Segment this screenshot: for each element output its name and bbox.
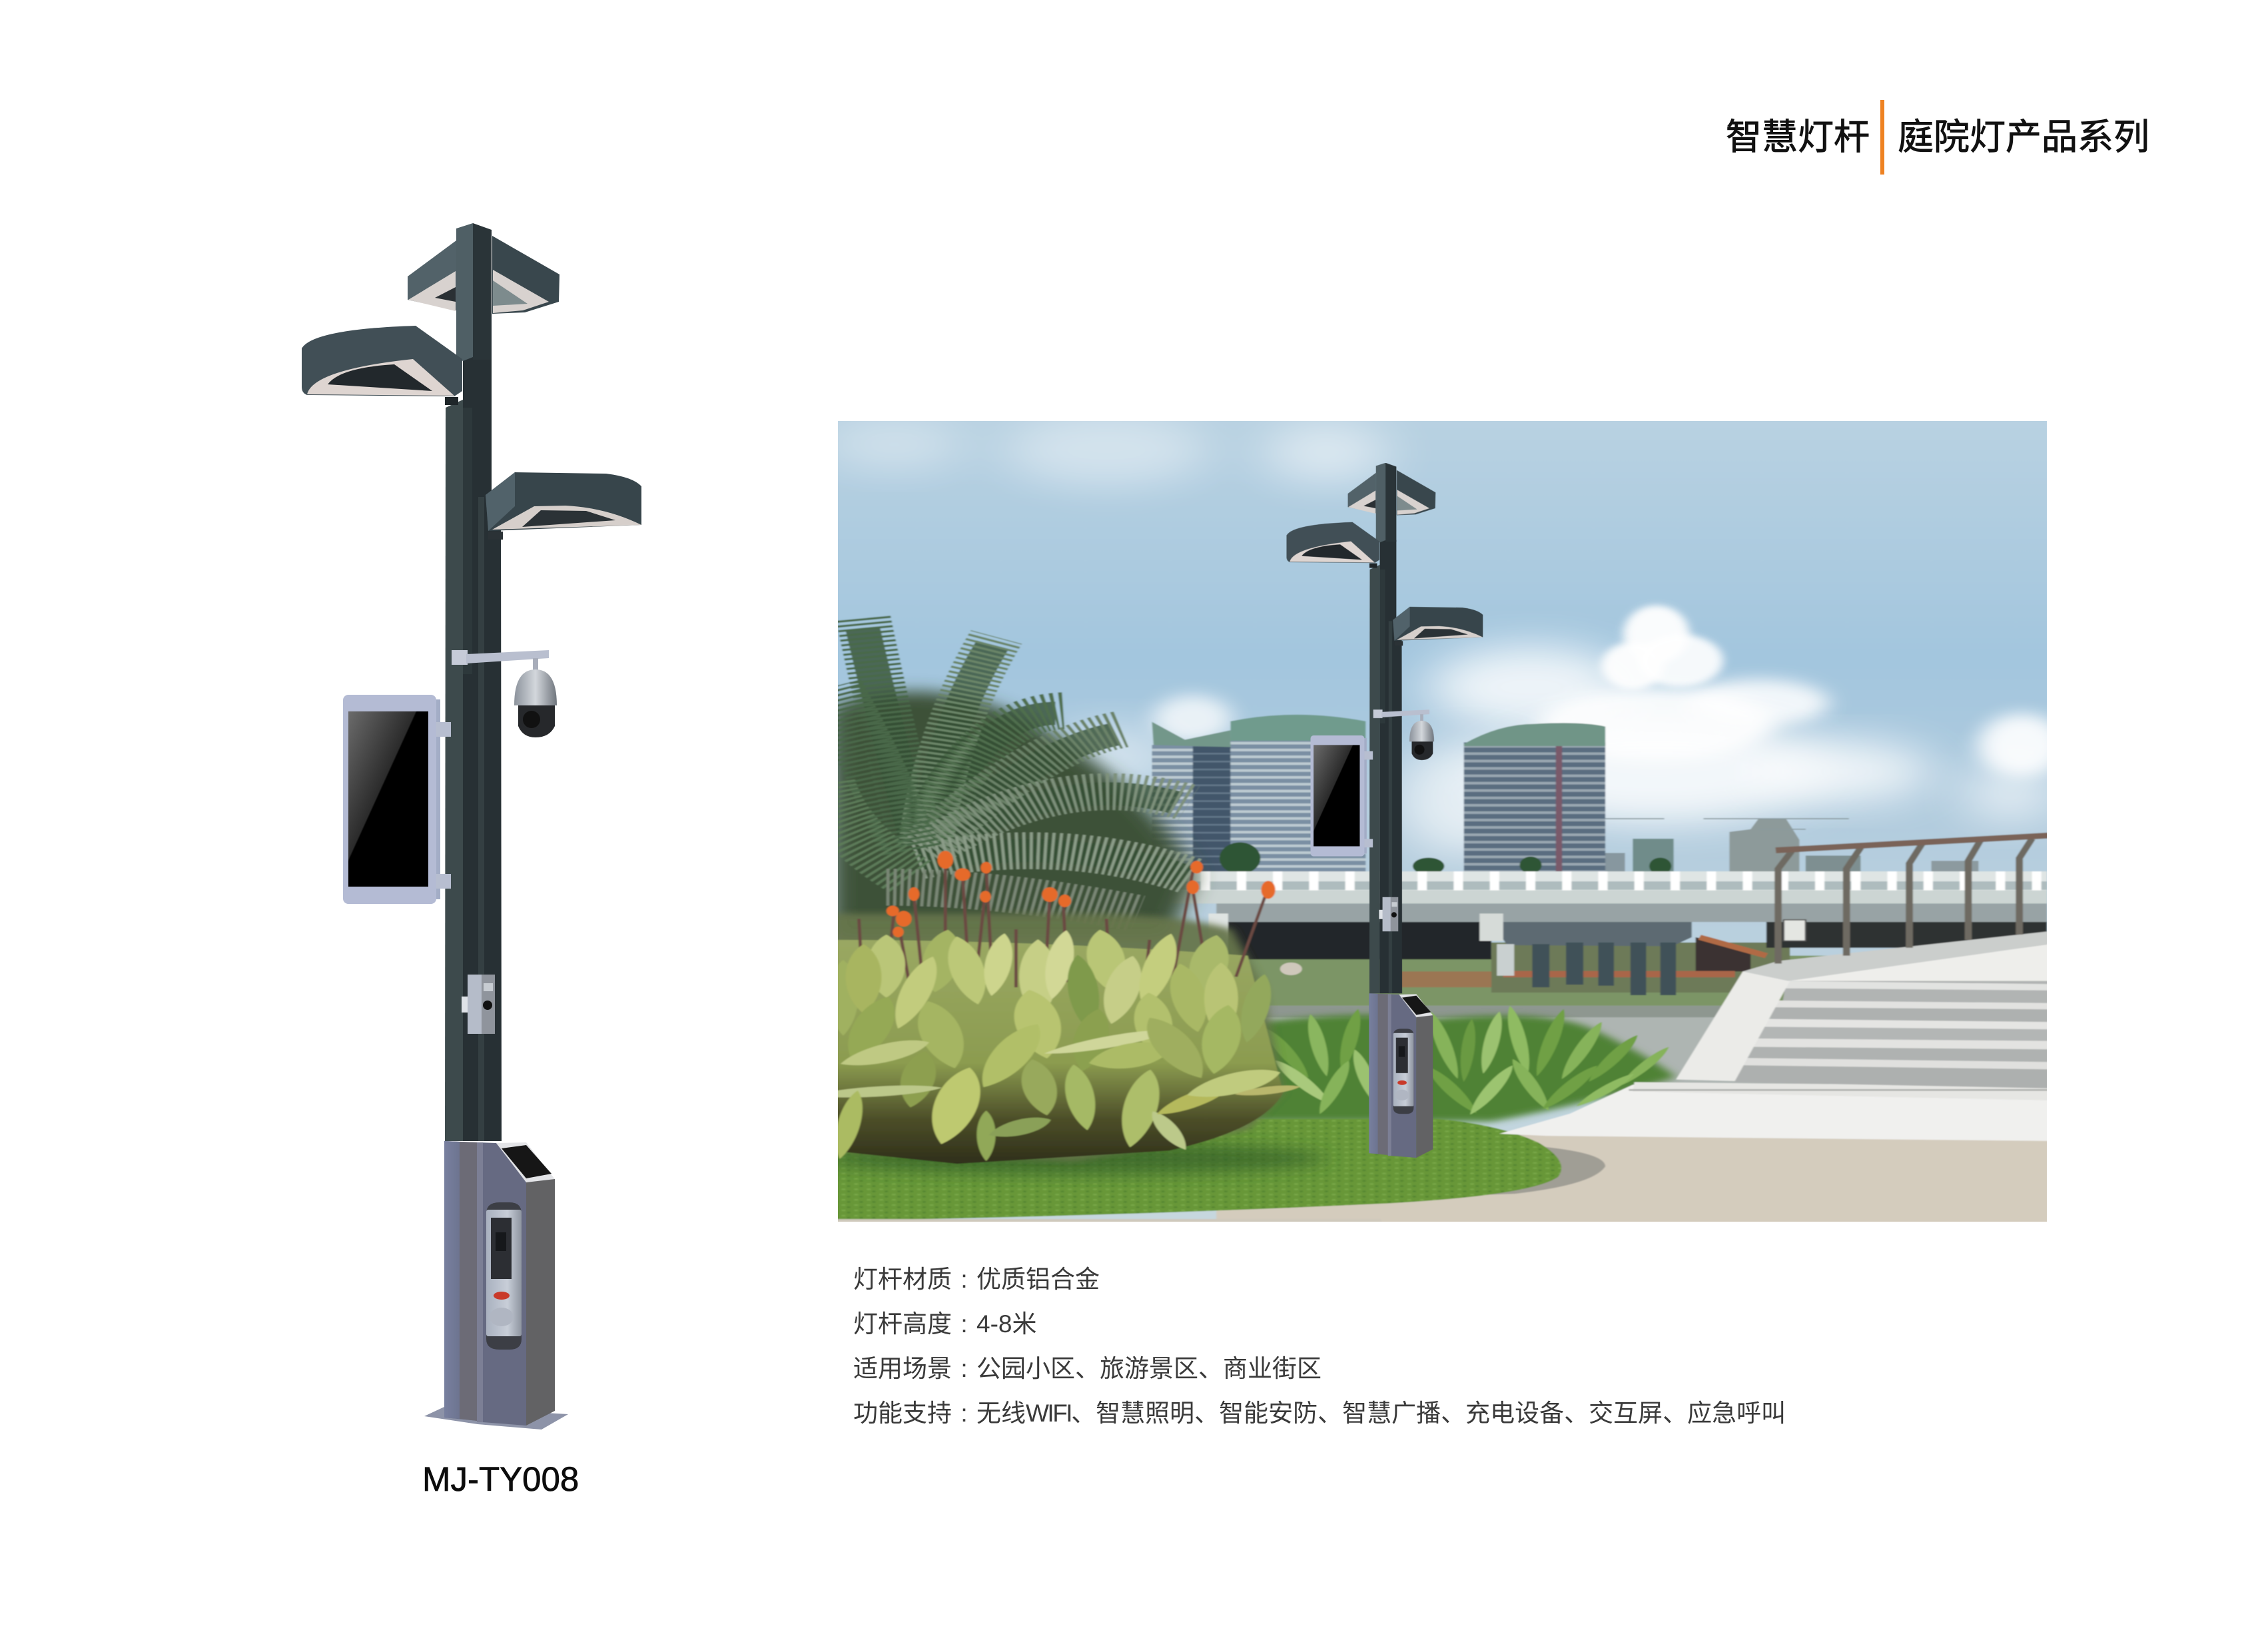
spec: applicable scenes: : xyxy=(960,1355,968,1382)
base plate xyxy=(424,1407,568,1430)
spec: functions: 功能支持 无线WIFI、智慧照明、智能安防、智慧广播、充电设备、交互屏、应急呼叫 xyxy=(853,1400,1786,1427)
canna flowers xyxy=(887,851,1276,937)
sky xyxy=(831,416,2057,1227)
product illustration: smart lamp pole xyxy=(302,223,641,1430)
title: product series header xyxy=(1726,100,2149,175)
far bank and water xyxy=(1216,956,1829,1095)
spec: height: 灯杆高度 4-8米 xyxy=(853,1310,1036,1338)
bridge xyxy=(1169,871,2047,995)
park scene xyxy=(810,413,2065,1227)
handrail xyxy=(1776,835,2057,964)
divider: orange bar xyxy=(1880,100,1884,175)
photo: lamp installed in waterfront park xyxy=(838,421,2047,1222)
spec: height: : xyxy=(960,1310,968,1338)
photo lamp pole xyxy=(1287,463,1483,1158)
lamp pole with lamps, camera, screen and base xyxy=(302,223,641,1426)
trees behind bridge xyxy=(1126,843,1671,879)
spec: functions: : xyxy=(960,1400,968,1427)
spec: applicable scenes: 适用场景 公园小区、旅游景区、商业街区 xyxy=(853,1355,1321,1382)
heading: courtyard lamp series: 庭院灯产品系列 xyxy=(1898,117,2149,157)
high-rise towers xyxy=(1152,715,1605,873)
canna leaves xyxy=(810,928,1301,1161)
heading: smart pole: 智慧灯杆 xyxy=(1726,117,1870,157)
canna plants xyxy=(810,851,1301,1164)
model label: MJ-TY008 xyxy=(422,1460,579,1498)
canna stalks xyxy=(859,861,1268,993)
right grass bed xyxy=(1248,1005,1676,1122)
palm tree xyxy=(823,616,1197,940)
clouds xyxy=(823,413,2065,855)
spec: material: 灯杆材质 优质铝合金 xyxy=(853,1266,1100,1293)
spec: material: : xyxy=(960,1266,968,1293)
specifications text block xyxy=(853,1266,1786,1427)
distant skyline xyxy=(1114,819,1978,873)
path and lawn edge xyxy=(823,1119,2057,1227)
stairs and landing xyxy=(1499,931,2057,1141)
